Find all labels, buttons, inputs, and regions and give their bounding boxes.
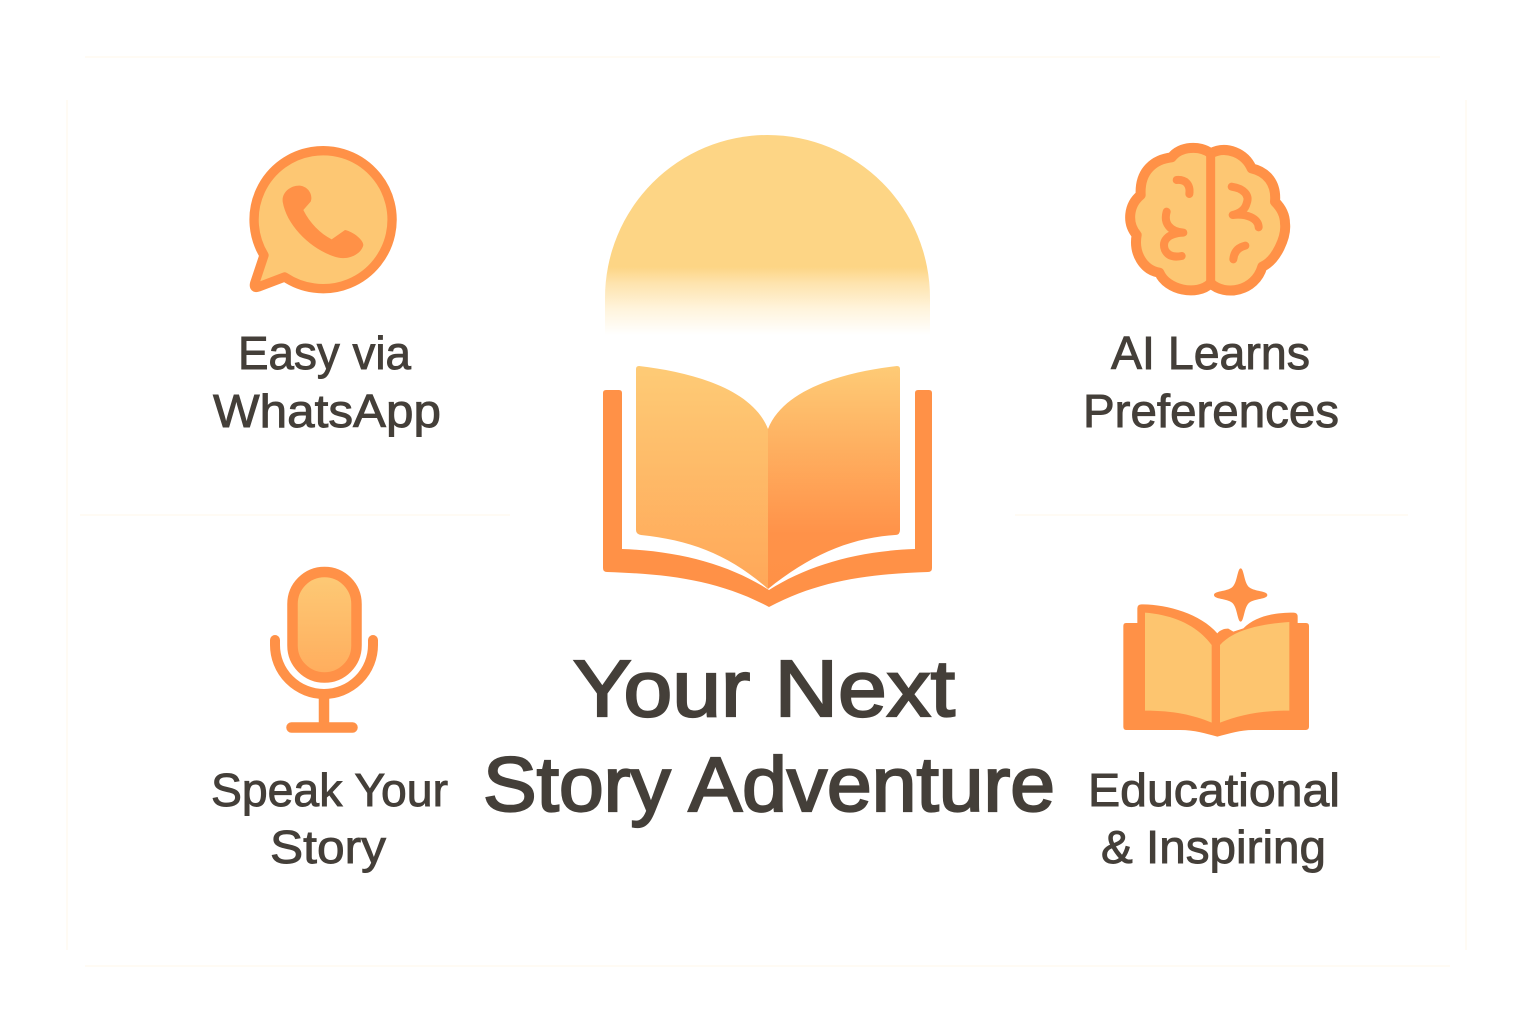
panel: easy via whatsapp bbox=[213, 151, 441, 437]
book cover bbox=[603, 390, 932, 607]
label bbox=[1083, 327, 1339, 437]
icon: open book bbox=[603, 366, 932, 607]
icon: brain bbox=[1130, 148, 1285, 291]
label: Educational bbox=[1088, 764, 1340, 816]
panel: educational and inspiring bbox=[1088, 568, 1340, 873]
label: & Inspiring bbox=[1101, 821, 1326, 873]
icon: microphone bbox=[275, 572, 373, 728]
left page bbox=[636, 366, 768, 589]
label bbox=[1088, 764, 1340, 873]
label bbox=[211, 764, 448, 873]
icon: book with sparkle bbox=[1123, 568, 1309, 737]
right page bbox=[768, 366, 900, 589]
label: WhatsApp bbox=[213, 385, 441, 437]
label: Easy via bbox=[238, 327, 411, 379]
label: Preferences bbox=[1083, 385, 1339, 437]
label: Story bbox=[270, 821, 386, 873]
icon: whatsapp chat bubble bbox=[254, 151, 392, 289]
title: Story Adventure bbox=[483, 742, 1055, 828]
label bbox=[213, 327, 441, 437]
panel: speak your story bbox=[211, 572, 448, 873]
label: AI Learns bbox=[1111, 327, 1310, 379]
icon: sun behind book bbox=[605, 135, 930, 335]
label: Speak Your bbox=[211, 764, 448, 816]
title: Your Next bbox=[573, 644, 955, 733]
panel: ai learns preferences bbox=[1083, 148, 1339, 437]
title bbox=[483, 644, 1055, 828]
